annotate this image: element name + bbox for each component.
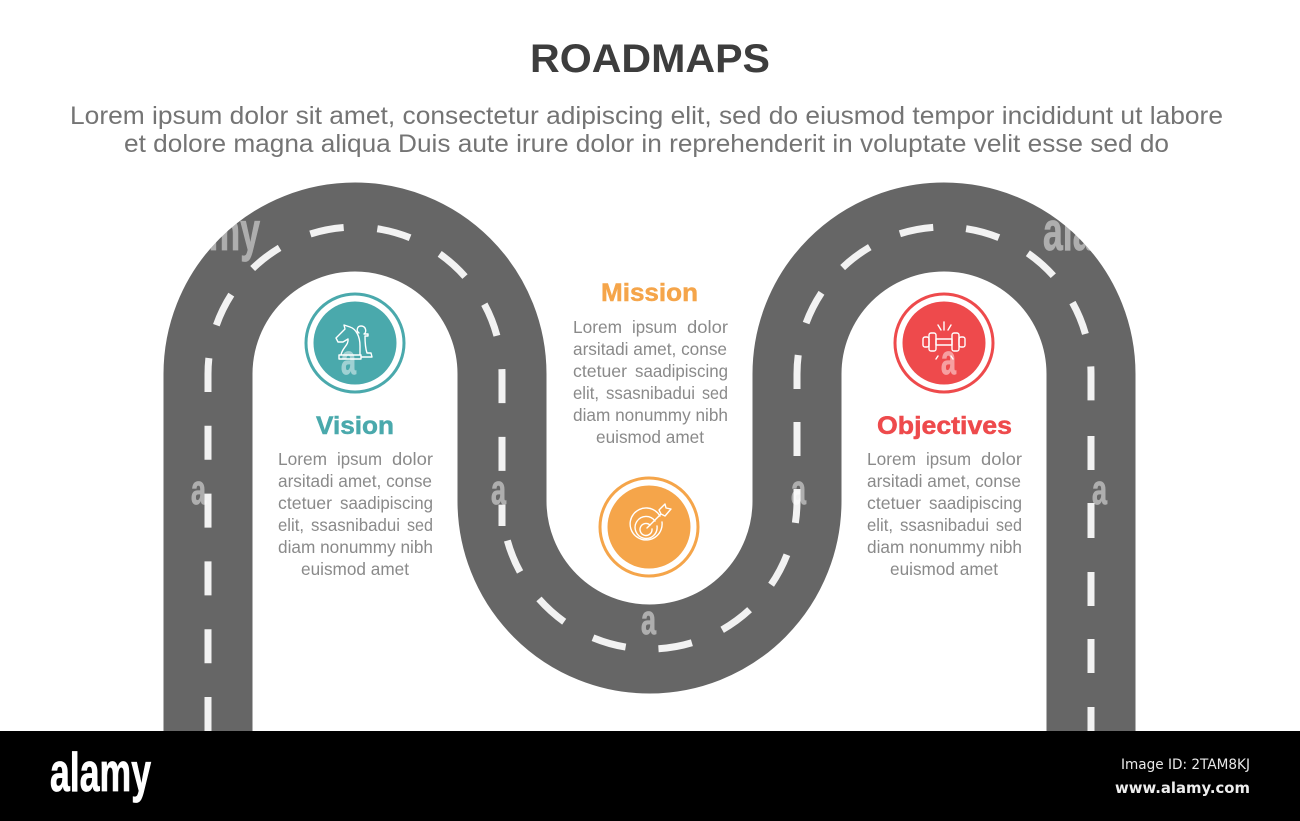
text: mission description: diam nonummy nibh	[573, 405, 728, 425]
icon: objectives dumbbell	[895, 294, 993, 392]
heading: mission: Mission	[601, 279, 698, 307]
title: ROADMAPS	[530, 37, 770, 81]
watermark letters: a	[491, 466, 506, 513]
text: objectives description: ssasnibadui	[900, 515, 989, 535]
text: vision description: euismod amet	[301, 559, 409, 579]
footer logo: alamy	[50, 741, 151, 803]
text: mission description: elit,	[573, 383, 599, 403]
text: vision description: sed	[407, 515, 433, 535]
text: objectives description	[867, 449, 1022, 579]
watermark letters: a	[1092, 466, 1107, 513]
text: objectives description: sed	[996, 515, 1022, 535]
text: mission description	[573, 317, 728, 447]
text: vision description: Lorem	[278, 449, 327, 469]
text: objectives description: Lorem	[867, 449, 916, 469]
icon: mission target	[600, 478, 698, 576]
text: vision description: ssasnibadui	[311, 515, 400, 535]
text: objectives description: diam nonummy nibh	[867, 537, 1022, 557]
watermark letters: alamy	[1043, 200, 1144, 262]
watermark letters: a	[341, 336, 356, 383]
panel: mission	[573, 279, 728, 576]
panel: vision	[278, 294, 433, 579]
heading: objectives: Objectives	[877, 412, 1012, 440]
text: vision description: diam nonummy nibh	[278, 537, 433, 557]
text: mission description: ssasnibadui	[606, 383, 695, 403]
panel: objectives	[867, 294, 1022, 579]
watermark letters: alamy	[159, 200, 260, 262]
text: mission description: dolor	[687, 317, 728, 337]
text: objectives description: dolor	[981, 449, 1022, 469]
text: objectives description: elit,	[867, 515, 893, 535]
text: mission description: ctetuer	[573, 361, 627, 381]
text: objectives description: arsitadi amet, conse	[867, 471, 1021, 491]
icon: vision chess pieces	[306, 294, 404, 392]
intro text: et dolore magna aliqua Duis aute irure dolor in reprehenderit in voluptate velit esse sed do	[124, 130, 1169, 158]
footer bar	[0, 731, 1300, 821]
text: vision description: saadipiscing	[340, 493, 433, 513]
watermark letters: a	[641, 596, 656, 643]
intro text	[70, 102, 1223, 158]
text: mission description: euismod amet	[596, 427, 704, 447]
text: mission description: ipsum	[632, 317, 677, 337]
text: vision description	[278, 449, 433, 579]
text: vision description: ctetuer	[278, 493, 332, 513]
watermark letters: a	[941, 336, 956, 383]
text: mission description: saadipiscing	[635, 361, 728, 381]
intro text: Lorem ipsum dolor sit amet, consectetur adipiscing elit, sed do eiusmod tempor incididunt ut labore	[70, 102, 1223, 130]
text: objectives description: euismod amet	[890, 559, 998, 579]
text: objectives description: saadipiscing	[929, 493, 1022, 513]
text: mission description: arsitadi amet, conse	[573, 339, 727, 359]
text: vision description: ipsum	[337, 449, 382, 469]
text: mission description: Lorem	[573, 317, 622, 337]
text: mission description: sed	[702, 383, 728, 403]
footer image id: Image ID: 2TAM8KJ	[1121, 757, 1250, 773]
text: vision description: dolor	[392, 449, 433, 469]
text: objectives description: ipsum	[926, 449, 971, 469]
watermark letters: a	[191, 466, 206, 513]
winding road	[208, 227, 1091, 740]
footer url: www.alamy.com	[1115, 779, 1250, 797]
text: objectives description: ctetuer	[867, 493, 921, 513]
heading: vision: Vision	[316, 412, 394, 440]
watermark letters: a	[791, 466, 806, 513]
text: vision description: elit,	[278, 515, 304, 535]
watermark letters	[159, 200, 1144, 643]
text: vision description: arsitadi amet, conse	[278, 471, 432, 491]
